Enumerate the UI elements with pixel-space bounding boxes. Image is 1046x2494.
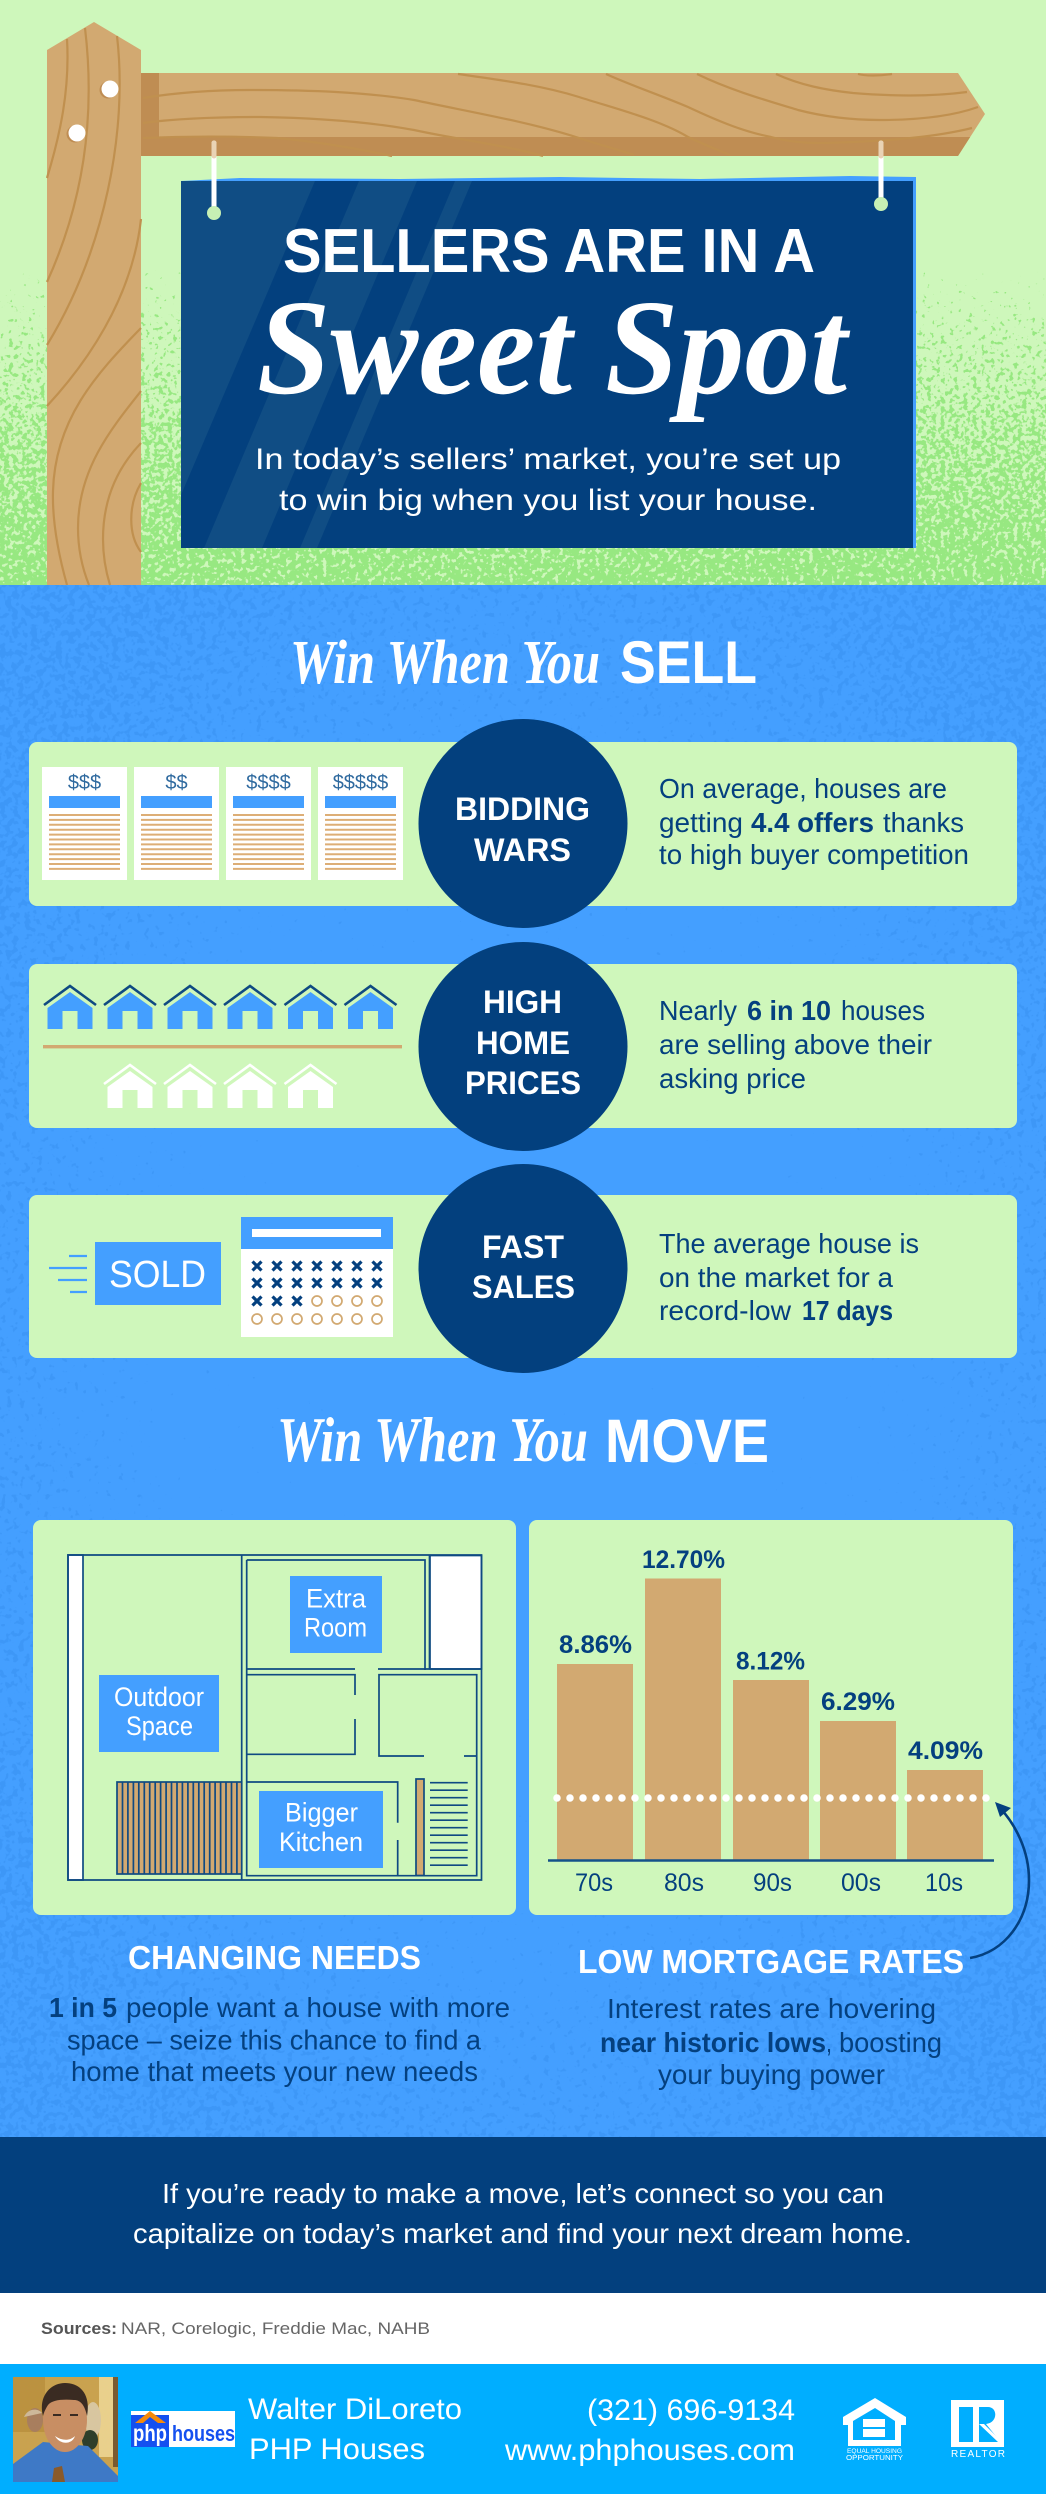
label: bigger kitchen: Kitchen [279,1827,363,1857]
icon: calendar [241,1217,393,1337]
panel: fast sales [29,1195,1017,1358]
icon: realtor [951,2400,1005,2460]
text block: changing needs: CHANGING NEEDS [128,1939,421,1976]
call to action band: capitalize on today’s market and find your next dream home. [133,2218,912,2249]
icon: offer documents: $$$$$ [333,772,388,794]
text: fast sales stat [659,1228,919,1326]
floor plan walls [68,1555,482,1880]
badge: bidding wars: BIDDING [455,791,590,827]
text block: changing needs: space – seize this chance to find a [67,2024,481,2056]
text block: low mortgage rates: your buying power [658,2059,885,2090]
text: fast sales stat: record-low [659,1295,791,1326]
hero background: lawn [0,0,1046,586]
icon: offer documents: $$ [165,772,188,794]
text: fast sales stat: 17 days [802,1295,893,1326]
agent photo [13,2377,118,2482]
text block: changing needs: 1 in 5 [49,1992,117,2023]
decade labels: 70s [575,1869,613,1897]
panel: bidding wars [29,742,1017,906]
icon: offer documents [42,767,403,880]
agent footer band [0,2364,1046,2494]
heading: win when you move: MOVE [605,1407,769,1475]
text: high home prices stat [659,995,932,1094]
agent name: PHP Houses [249,2433,425,2466]
wooden sign arm [141,73,985,156]
label: bigger kitchen [259,1791,383,1868]
text: bidding wars stat: 4.4 offers [751,807,874,838]
blue background [0,585,1046,2137]
hero subtitle: In today’s sellers’ market, you’re set up [255,443,841,476]
company logo: houses [172,2421,235,2446]
decade labels: 80s [664,1869,704,1897]
text block: changing needs: people want a house with more [126,1992,510,2023]
sources band: NAR, Corelogic, Freddie Mac, NAHB [121,2319,430,2338]
title: Sweet Spot [257,273,851,423]
dotted current-rate line [557,1794,986,1802]
hanging sign board [181,176,916,548]
icon: sold sign with speed lines: SOLD [109,1254,206,1296]
company logo [131,2411,235,2447]
decade labels [575,1869,963,1897]
text: high home prices stat: are selling above their [659,1029,932,1060]
text block: changing needs [49,1939,510,2087]
badge: fast sales: SALES [472,1269,575,1305]
heading: win when you sell: SELL [620,629,757,696]
text block: low mortgage rates [578,1943,964,2090]
call to action band: If you’re ready to make a move, let’s connect so you can [162,2178,884,2209]
call to action band [0,2137,1046,2293]
label: bigger kitchen: Bigger [285,1798,358,1828]
icon: equal housing opportunity [843,2398,906,2462]
agent name [248,2393,462,2466]
axis [548,1859,994,1862]
badge: high home prices: HIGH [483,984,562,1020]
bar values: 12.70% [642,1546,725,1574]
text: bidding wars stat: On average, houses are [659,773,947,804]
agent contact [504,2394,795,2467]
badge: bidding wars: WARS [474,832,571,868]
icon: offer documents: $$$$ [246,772,291,794]
badge: fast sales: FAST [482,1229,564,1265]
bar values: 6.29% [821,1688,895,1716]
panel: high home prices [29,964,1017,1128]
company logo: php [133,2420,167,2446]
agent name: Walter DiLoreto [248,2393,462,2426]
icon: offer documents: $$$ [68,772,101,794]
hero subtitle [255,443,841,517]
label: outdoor space: Outdoor [114,1682,204,1712]
text block: low mortgage rates: , [826,2027,832,2058]
heading: win when you sell: Win When You [290,629,600,697]
text: high home prices stat: 6 in 10 [747,995,831,1026]
text: high home prices stat: houses [841,995,925,1026]
bars [557,1578,983,1860]
badge: fast sales [418,1164,628,1373]
text block: low mortgage rates: Interest rates are hovering [607,1993,936,2024]
bar values: 8.86% [559,1631,632,1659]
text block: low mortgage rates: LOW MORTGAGE RATES [578,1943,964,1980]
hero subtitle: to win big when you list your house. [279,484,817,517]
panel: floor plan [33,1520,516,1915]
text: high home prices stat: Nearly [659,995,737,1026]
bar values: 8.12% [736,1648,805,1676]
label: outdoor space [99,1675,219,1752]
text: bidding wars stat: to high buyer competition [659,839,969,870]
label: extra room: Extra [306,1584,367,1614]
icon: houses above and below asking price [43,986,402,1108]
icon: equal housing opportunity: OPPORTUNITY [846,2453,903,2462]
icon: sold sign with speed lines [49,1242,221,1305]
badge: high home prices: HOME [476,1025,570,1061]
text: bidding wars stat: getting [659,807,743,838]
icon: realtor: REALTOR [951,2449,1005,2460]
wooden sign post [47,22,141,585]
agent contact: (321) 696-9134 [587,2394,795,2427]
text: bidding wars stat: thanks [883,807,964,838]
arrow: low mortgage rates to dotted line [970,1802,1029,1958]
decade labels: 10s [925,1869,963,1897]
decade labels: 90s [753,1869,792,1897]
badge: bidding wars [418,719,628,928]
panel: mortgage rate bar chart [529,1520,1013,1915]
title: SELLERS ARE IN A [283,217,815,286]
bar values: 4.09% [908,1737,983,1765]
bar values [559,1546,983,1765]
text: fast sales stat: The average house is [659,1228,919,1259]
hanging strings [207,143,888,220]
sources band: Sources: [41,2319,117,2338]
badge: high home prices [418,942,628,1151]
sources band [0,2293,1046,2364]
icon: equal housing opportunity: EQUAL HOUSING [847,2448,902,2455]
text: bidding wars stat [659,773,969,870]
text: high home prices stat: asking price [659,1063,806,1094]
text block: changing needs: home that meets your new needs [71,2056,478,2087]
text block: low mortgage rates: boosting [839,2027,942,2058]
label: extra room [290,1576,382,1653]
label: extra room: Room [304,1612,367,1642]
decade labels: 00s [841,1869,881,1897]
text block: low mortgage rates: near historic lows [600,2027,826,2058]
agent contact: www.phphouses.com [504,2434,795,2467]
text: fast sales stat: on the market for a [659,1262,894,1293]
heading: win when you move: Win When You [277,1404,588,1475]
label: outdoor space: Space [126,1711,193,1741]
badge: high home prices: PRICES [465,1065,581,1101]
